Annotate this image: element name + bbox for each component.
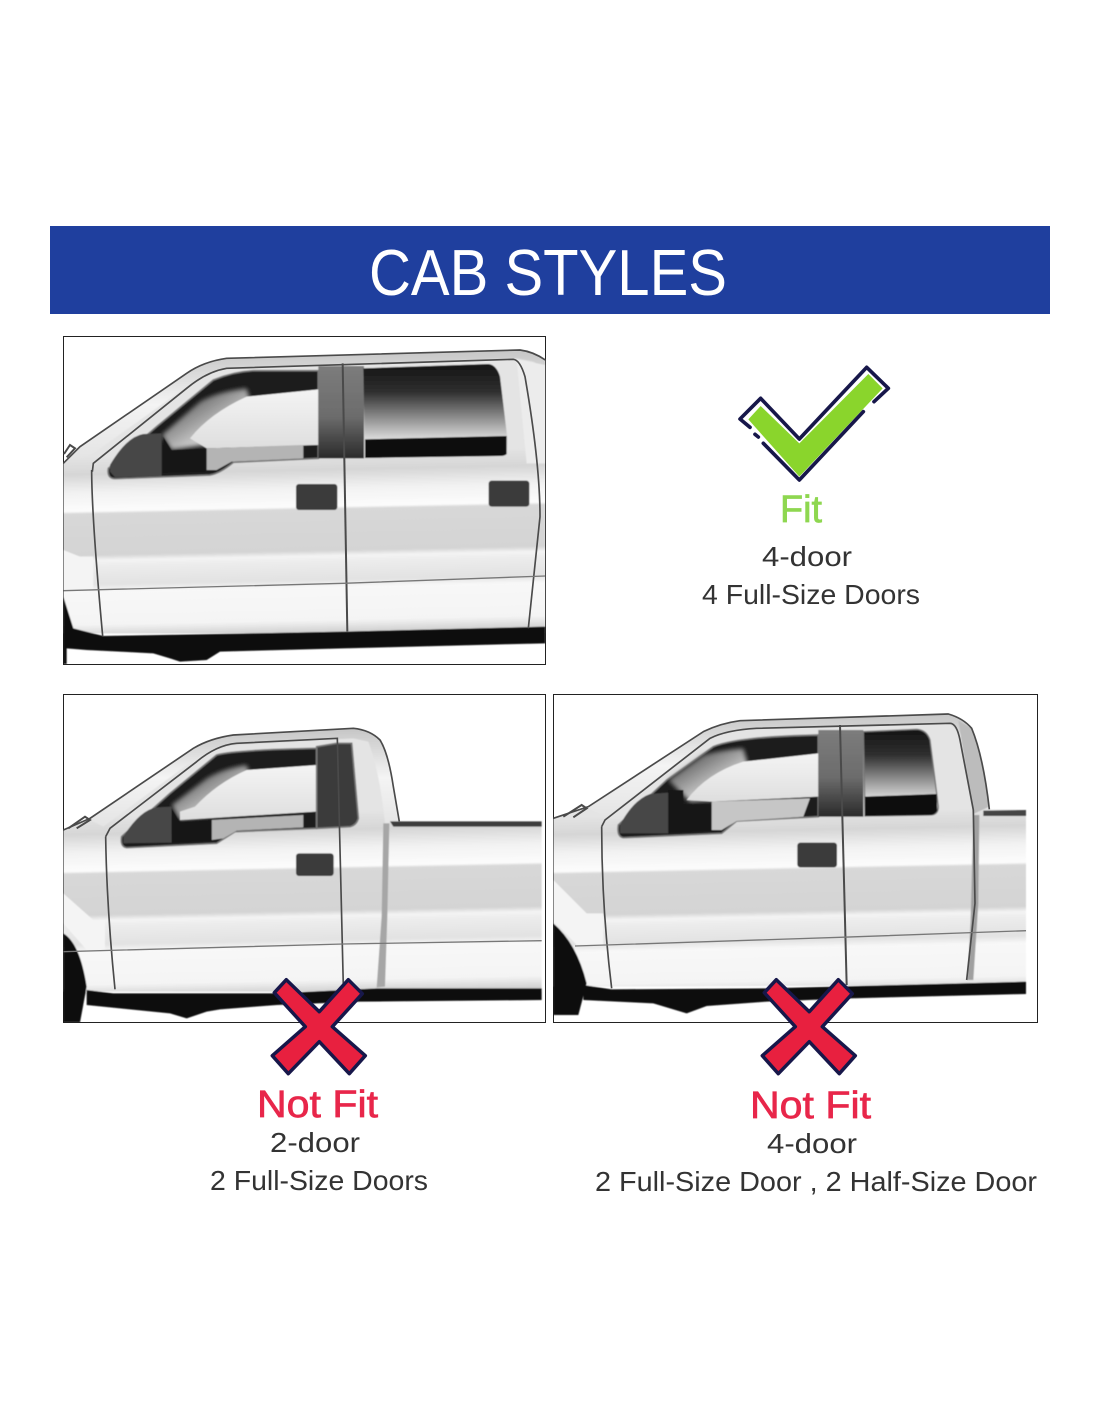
label: not fit 2-door: Not Fit [257, 1084, 378, 1126]
label: not fit 2-door: 2-door [270, 1127, 360, 1158]
panel: 2-door regular cab truck [63, 694, 545, 1022]
label: not fit extended cab: Not Fit [750, 1085, 871, 1127]
label: not fit extended cab [595, 1085, 1037, 1197]
panel: extended cab truck [553, 694, 1038, 1022]
icon: red cross right [762, 980, 855, 1074]
label: not fit extended cab: 4-door [767, 1128, 857, 1159]
label: fit: 4-door [762, 541, 852, 572]
label: fit [702, 489, 920, 610]
icon: red cross left [272, 980, 365, 1074]
title banner [50, 226, 1050, 314]
panel: 4 full-size door truck [63, 336, 545, 664]
label: fit: 4 Full-Size Doors [702, 579, 920, 610]
label: not fit 2-door: 2 Full-Size Doors [210, 1165, 428, 1196]
icon: green check mark [740, 367, 888, 480]
label: not fit 2-door [210, 1084, 428, 1196]
title banner: CAB STYLES [369, 236, 727, 309]
label: fit: Fit [780, 489, 822, 531]
label: not fit extended cab: 2 Full-Size Door , 2 Half-Size Door [595, 1166, 1037, 1197]
